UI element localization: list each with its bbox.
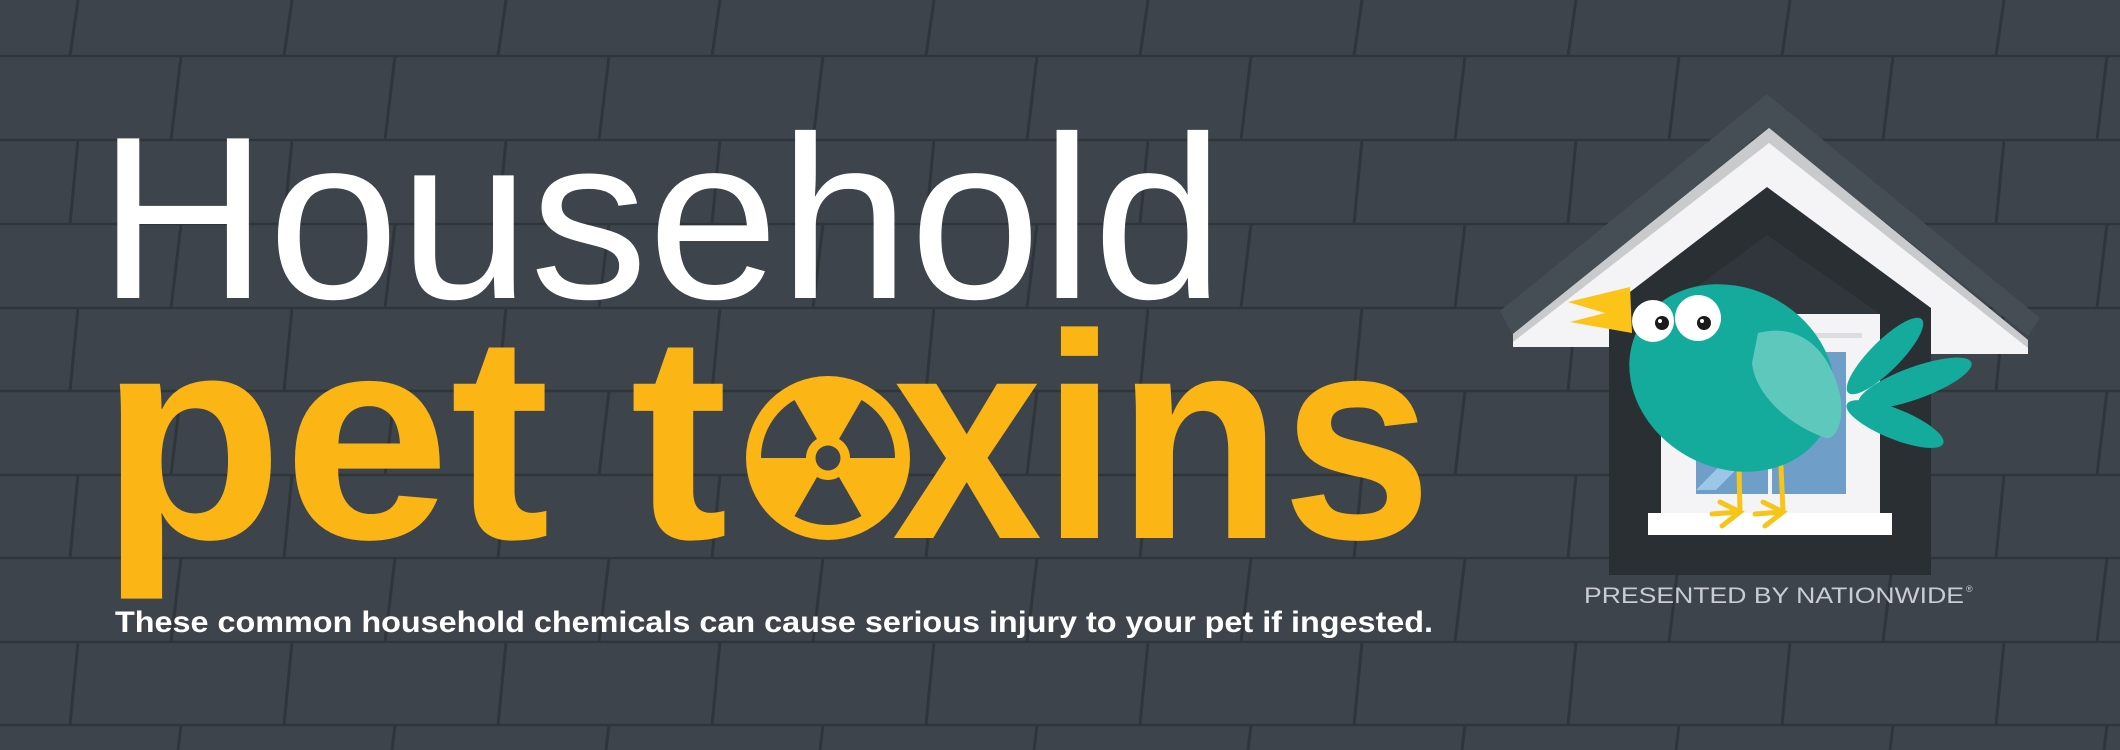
subtitle: These common household chemicals can cause serious injury to your pet if ingested. [115, 606, 1433, 639]
bird legs [1712, 466, 1783, 526]
roof [1500, 94, 2040, 336]
title: pet toxins: pet [100, 274, 550, 602]
illustration: birdhouse with bird [1500, 94, 2040, 575]
bird eyes [1632, 300, 1674, 342]
title: Household: Household [98, 89, 1224, 348]
title: pet toxins: t [630, 274, 728, 600]
bird beak [1568, 287, 1632, 333]
text: ® [1966, 584, 1973, 594]
icon: radiation symbol as letter o [746, 376, 910, 540]
house body [1609, 187, 1931, 575]
window [1661, 314, 1880, 514]
title: pet toxins: xins [892, 274, 1432, 600]
bird tail [1838, 309, 1977, 457]
bird body [1596, 249, 1868, 507]
credit: presented by Nationwide: PRESENTED BY NATIONWIDE [1584, 583, 1964, 608]
title: pet toxins [100, 274, 1432, 602]
bird wing [1752, 331, 1841, 438]
